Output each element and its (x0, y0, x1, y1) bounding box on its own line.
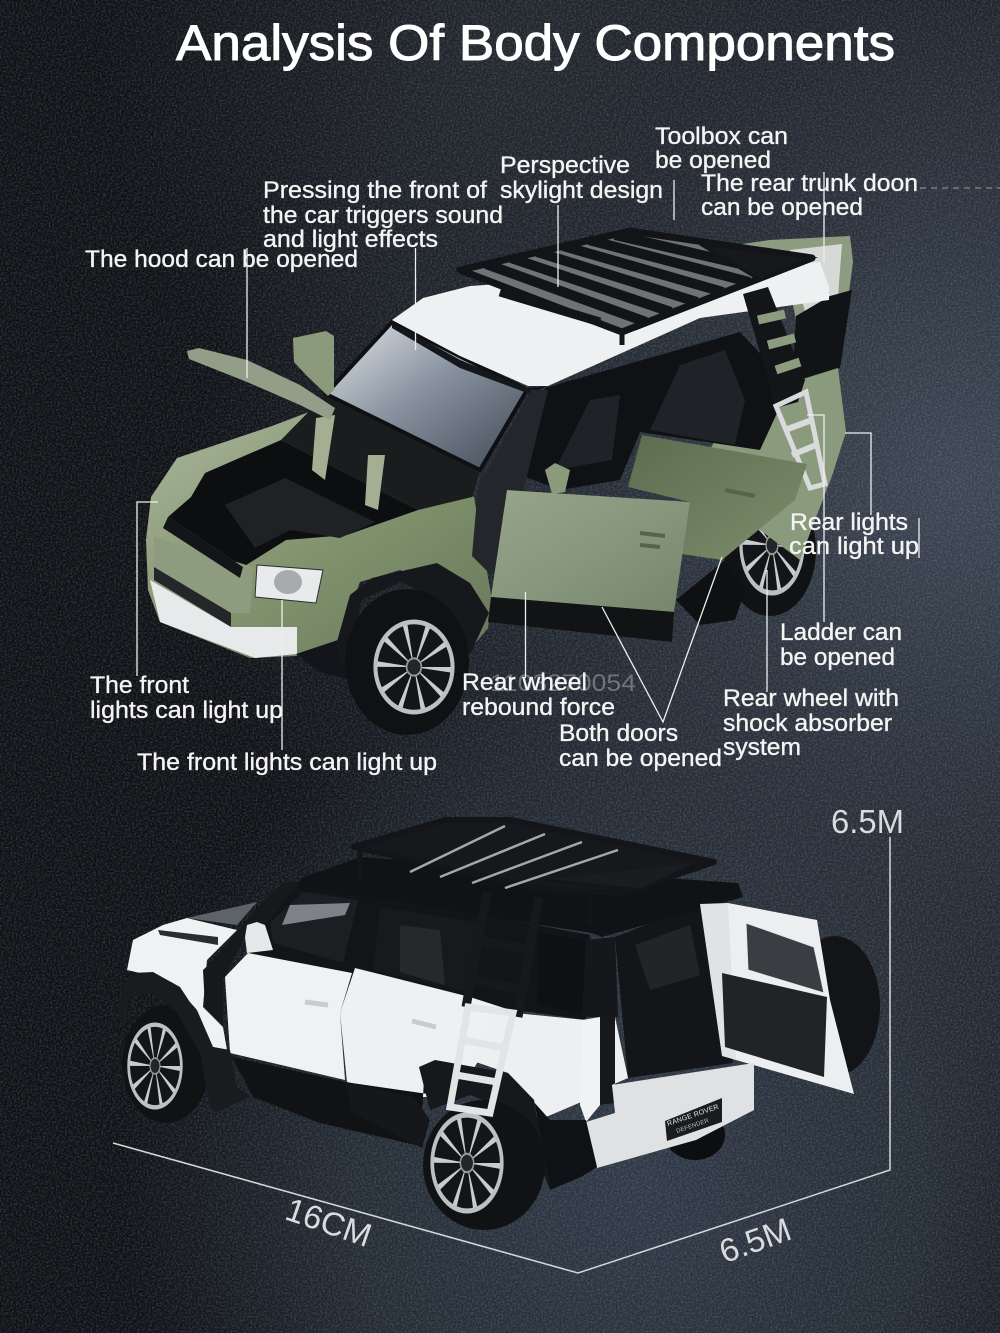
seats (555, 350, 745, 470)
callout: toolbox: Toolbox can (655, 123, 788, 150)
roof upper (300, 857, 743, 937)
lower black sill (232, 1057, 456, 1146)
open rear door (722, 903, 854, 1094)
ladder (450, 893, 539, 1113)
engine cover (225, 478, 375, 548)
callout: toolbox: be opened (655, 147, 771, 174)
callout: trunk door: can be opened (701, 194, 863, 221)
green car illustration (146, 231, 853, 735)
callout: sound and light: Pressing the front of (263, 177, 487, 204)
callout: front lights lower: The front lights can light up (137, 749, 437, 776)
white front bumper (150, 580, 297, 658)
callout: trunk door (701, 170, 1000, 262)
callout: front lights left: The front (90, 672, 189, 699)
cabin dark base (240, 880, 590, 1020)
length label: 16CM (281, 1190, 376, 1254)
tail light strip (600, 1017, 615, 1105)
callout: sound and light: the car triggers sound (263, 202, 503, 229)
callout: skylight: Perspective (500, 152, 630, 179)
rear plate (665, 1098, 722, 1141)
callout: trunk door: The rear trunk doon (701, 170, 918, 197)
callout: rear lights (789, 433, 919, 560)
callout: toolbox (655, 123, 788, 220)
front rim (373, 619, 455, 715)
door sill (488, 597, 674, 642)
roof rack (460, 231, 812, 345)
callout: skylight: skylight design (500, 177, 663, 204)
rear body side (700, 368, 846, 560)
side cabin interior (520, 332, 790, 490)
open tailgate (742, 236, 853, 372)
pillar strip (203, 882, 300, 1027)
open hood (187, 348, 335, 420)
mirror (545, 463, 570, 494)
quarter body (470, 1013, 586, 1120)
headlight ring (274, 570, 302, 594)
rear black panel (792, 290, 852, 386)
rear plate: DEFENDER (676, 1118, 710, 1135)
callout: front lights left: lights can light up (90, 697, 283, 724)
inner door panel (722, 973, 827, 1077)
rear black upper (582, 937, 618, 1017)
callout: both doors: Both doors (559, 720, 678, 747)
rear open door (628, 435, 807, 560)
front rim of white car (127, 1022, 183, 1110)
rear door (340, 968, 510, 1097)
front door (225, 953, 352, 1080)
callout: rebound: Rear wheel (462, 669, 587, 696)
left mirror (293, 331, 334, 396)
callout: skylight (500, 152, 663, 287)
rear bumper (586, 1063, 754, 1168)
callout: ladder: Ladder can (780, 619, 902, 646)
width label: 6.5M (714, 1210, 796, 1270)
callout: shock absorber: shock absorber (723, 710, 892, 737)
front wheel arch (336, 563, 489, 668)
callout: rebound: rebound force (462, 694, 615, 721)
hood struts (312, 415, 385, 510)
cargo opening (615, 903, 733, 1078)
spare wheel (790, 936, 880, 1076)
hood panel (187, 902, 257, 925)
callout: both doors: can be opened (559, 745, 722, 772)
cowl dark area (281, 394, 480, 510)
cargo seat backs (635, 925, 700, 990)
rear pillar white (700, 903, 736, 1060)
callout: shock absorber (723, 570, 899, 761)
front tyre (345, 589, 469, 735)
callout: rear lights: Rear lights (790, 509, 908, 536)
callout: sound and light: and light effects (263, 226, 438, 253)
rear far tyre (665, 1110, 725, 1160)
roof rack (354, 820, 714, 925)
title: Analysis Of Body Components (176, 15, 895, 71)
callout: shock absorber: system (723, 734, 801, 761)
windows (270, 892, 586, 1014)
front panel (154, 537, 253, 613)
door handles (305, 1002, 436, 1027)
A pillar (472, 390, 548, 574)
rear arch (419, 1060, 550, 1190)
rear rim of white car (430, 1112, 504, 1214)
lower rear black sill (676, 560, 745, 625)
rear wheel of green car (724, 484, 816, 616)
callout: shock absorber: Rear wheel with (723, 685, 899, 712)
callout: ladder (780, 415, 902, 671)
callout: rear lights: can light up (789, 533, 919, 560)
main body (146, 412, 492, 658)
roof black windshield trim (392, 322, 547, 394)
tailgate white inner (790, 244, 842, 312)
watermark: 1103270054 (490, 670, 636, 697)
callout: sound and light (263, 177, 503, 350)
height label: 6.5M (831, 803, 904, 840)
fender vent (158, 930, 218, 945)
engine bay (168, 440, 418, 567)
headlight (255, 565, 323, 603)
rear tyre of white car (423, 1100, 545, 1230)
front arch (118, 972, 250, 1112)
mirror (245, 922, 273, 953)
front grille (154, 567, 231, 627)
rear ladder (743, 287, 825, 488)
callout: ladder: be opened (780, 644, 895, 671)
callout: both doors (559, 557, 722, 772)
rear body lower (612, 1017, 628, 1103)
rear plate: RANGE ROVER (666, 1104, 720, 1128)
white car illustration (118, 820, 880, 1230)
door handles (640, 490, 755, 547)
hood front vent (163, 517, 243, 578)
dimension lines (113, 837, 890, 1273)
white roof (392, 262, 829, 386)
rear face (580, 1017, 600, 1122)
windshield (326, 322, 527, 470)
door contour recess (746, 923, 824, 993)
callout: front lights left (90, 502, 283, 724)
black rear corner (508, 1073, 597, 1190)
front tyre of white car (122, 1005, 210, 1123)
callout: rebound (462, 592, 615, 721)
sill second (345, 1082, 430, 1148)
front lower bumper black (296, 640, 350, 680)
white fender (127, 918, 237, 1050)
callout: hood: The hood can be opened (85, 246, 358, 273)
front open door (491, 490, 690, 612)
